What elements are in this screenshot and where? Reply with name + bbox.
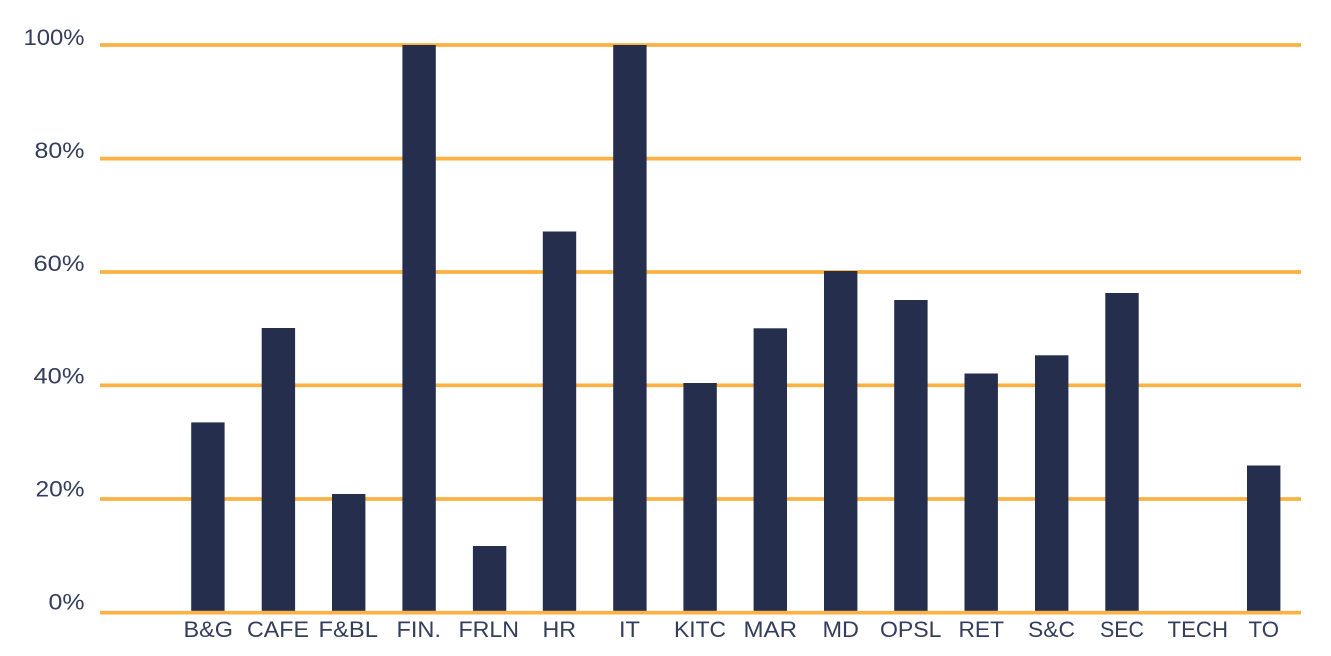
x axis labels: HR: [542, 617, 576, 642]
bars: [191, 45, 1280, 611]
x axis labels: B&G: [184, 617, 233, 642]
x axis labels: RET: [958, 617, 1004, 642]
y axis labels: 60%: [34, 251, 84, 276]
y axis labels: [24, 25, 84, 614]
x axis labels: CAFE: [247, 617, 309, 642]
x axis labels: S&C: [1028, 617, 1075, 642]
x axis labels: OPSL: [880, 617, 942, 642]
x axis labels: KITC: [674, 617, 726, 642]
x axis labels: IT: [619, 617, 640, 642]
y axis labels: 40%: [34, 364, 84, 388]
y axis labels: 100%: [24, 25, 84, 50]
x axis labels: FIN.: [396, 617, 441, 642]
x axis labels: TO: [1248, 617, 1279, 642]
x axis labels: FRLN: [458, 617, 519, 642]
x axis labels: SEC: [1100, 617, 1144, 642]
x axis labels: [184, 617, 1279, 642]
y axis labels: 0%: [48, 590, 84, 614]
x axis labels: MD: [822, 617, 859, 642]
x axis labels: TECH: [1168, 617, 1228, 642]
x axis labels: F&BL: [318, 617, 378, 642]
y axis labels: 80%: [34, 138, 84, 163]
x axis labels: MAR: [744, 617, 797, 642]
y axis labels: 20%: [36, 476, 84, 502]
